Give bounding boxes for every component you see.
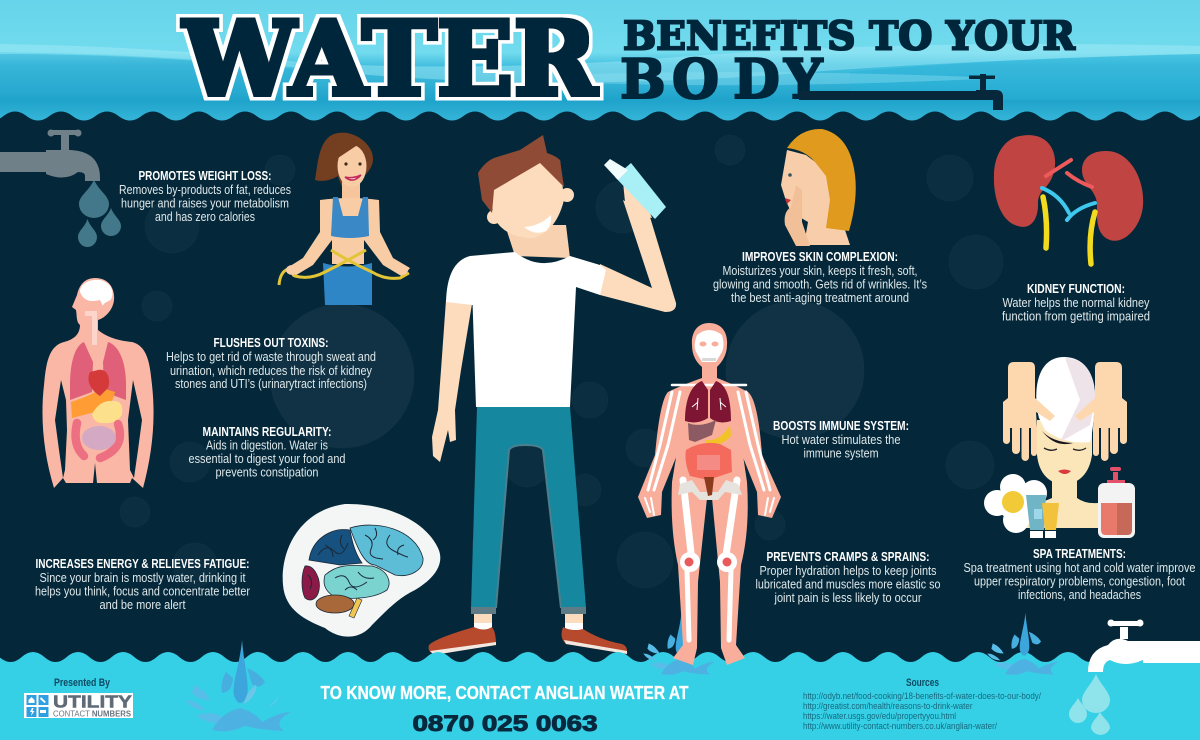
text block: promotes weight loss: and has zero calories (155, 210, 255, 224)
man: trousers (471, 407, 586, 608)
anatomy: liver and stomach (688, 420, 716, 442)
icon: woman with measuring tape (279, 133, 410, 305)
anatomy: arm and leg bones (645, 385, 774, 640)
text block: promotes weight loss: PROMOTES WEIGHT LOSS: (138, 169, 272, 183)
presented by label: Presented By (54, 677, 111, 689)
text block: flushes out toxins: FLUSHES OUT TOXINS: (214, 336, 328, 350)
man: ankles and socks (474, 614, 583, 630)
title: WATER: WATER (182, 0, 598, 120)
text block: spa treatments (964, 547, 1196, 602)
subtitle: benefits to your: BENEFITS TO YOUR (623, 14, 1076, 60)
anatomy: pelvis (678, 480, 742, 500)
icon: tap top left (0, 130, 121, 247)
man: left arm (432, 300, 472, 462)
logo: utility contact numbers (24, 692, 133, 718)
man: t-shirt (446, 252, 606, 407)
text block: maintains regularity (188, 425, 346, 480)
text block: flushes out toxins (166, 336, 376, 391)
text block: kidney function (1002, 282, 1150, 324)
icon: splash centre (186, 640, 291, 731)
sources heading: Sources (906, 677, 939, 689)
logo: utility contact numbers: UTILITY (53, 692, 132, 712)
icon: spa treatment (984, 357, 1135, 538)
icon: splash right (987, 613, 1059, 675)
anatomy: lungs (685, 381, 731, 422)
text block: spa treatments: SPA TREATMENTS: (1033, 547, 1126, 561)
anatomy: knees (680, 552, 737, 572)
anatomy: skin (638, 323, 781, 665)
anatomy: skull (695, 330, 724, 362)
text block: prevents cramps: Proper hydration helps to keep joints (760, 564, 936, 578)
text block: boosts immune system: Hot water stimulates the (782, 433, 901, 447)
spa: right hand (1075, 362, 1127, 461)
icon: kidneys (994, 135, 1143, 264)
text block: boosts immune system: immune system (804, 446, 878, 460)
text block: flushes out toxins: Helps to get rid of waste through sweat and (166, 350, 376, 364)
icon: splash at feet (643, 613, 715, 675)
logo: utility contact numbers: CONTACT NUMBERS (53, 710, 132, 718)
text block: increases energy: INCREASES ENERGY & RELIEVES FATIGUE: (36, 557, 250, 571)
text block: promotes weight loss: Removes by-products of fat, reduces (119, 183, 291, 197)
text block: improves skin complexion: the best anti-aging treatment around (731, 291, 909, 305)
sources list: https://water.usgs.gov/edu/propertyyou.html (803, 711, 956, 722)
wave: top edge of dark water (0, 112, 1200, 400)
text block: increases energy: and be more alert (100, 598, 186, 612)
man: neck (505, 225, 570, 258)
man: shoes (429, 627, 627, 655)
text block: prevents cramps: joint pain is less likely to occur (774, 591, 922, 605)
icon: woman with skin care (781, 129, 856, 246)
man: water bottle (604, 159, 666, 219)
footer band with wave (0, 652, 1200, 740)
text block: kidney function: Water helps the normal kidney (1002, 296, 1150, 310)
man: head (478, 135, 574, 238)
text block: prevents cramps (756, 550, 941, 605)
phone number: 0870 025 0063 (412, 711, 598, 736)
text block: maintains regularity: MAINTAINS REGULARITY: (202, 425, 332, 439)
text block: kidney function: KIDNEY FUNCTION: (1027, 282, 1125, 296)
spa: face (1037, 420, 1092, 485)
figure: skeleton and organs (638, 323, 781, 665)
text block: spa treatments: infections, and headaches (1018, 588, 1141, 602)
spa: left hand (1003, 362, 1055, 461)
man: hand (622, 172, 652, 218)
text block: improves skin complexion (713, 250, 927, 305)
decorative bubbles (120, 135, 1003, 588)
icon: title tap (799, 74, 1003, 110)
sources list: http://greatist.com/health/reasons-to-drink-water (803, 701, 972, 712)
text block: increases energy (35, 557, 250, 612)
text block: prevents cramps: lubricated and muscles more elastic so (756, 578, 941, 592)
sources list: http://www.utility-contact-numbers.co.uk/anglian-water/ (803, 721, 997, 732)
figure: man drinking water (429, 135, 676, 655)
text block: flushes out toxins: stones and UTI’s (urinarytract infections) (175, 377, 367, 391)
text block: promotes weight loss: hunger and raises your metabolism (121, 196, 289, 210)
text block: maintains regularity: prevents constipation (216, 466, 319, 480)
text block: maintains regularity: Aids in digestion. Water is (206, 438, 328, 452)
text block: boosts immune system (773, 419, 909, 460)
text block: kidney function: function from getting impaired (1002, 310, 1150, 324)
text block: increases energy: Since your brain is mostly water, drinking it (40, 571, 246, 585)
text block: flushes out toxins: urination, which reduces the risk of kidney (170, 364, 373, 378)
icon: tap bottom right (1069, 620, 1200, 735)
spa: daisy (984, 474, 1049, 533)
icon: brain (283, 504, 440, 637)
spa: towel (1036, 357, 1095, 442)
sources list: http://odyb.net/food-cooking/18-benefits-of-water-does-to-our-body/ (803, 691, 1041, 702)
spa: tubes (1026, 495, 1059, 538)
text block: boosts immune system: BOOSTS IMMUNE SYSTEM: (773, 419, 909, 433)
man: raised arm (600, 200, 676, 312)
text block: increases energy: helps you think, focus and concentrate better (35, 584, 250, 598)
icon: body with organs (42, 278, 154, 488)
header water band (0, 0, 1200, 125)
call to action: TO KNOW MORE, CONTACT ANGLIAN WATER AT (320, 682, 689, 703)
spa: fringe, eyes, lips (1042, 431, 1086, 474)
subtitle: body: BODY (620, 47, 824, 111)
text block: promotes weight loss (119, 169, 291, 224)
text block: improves skin complexion: Moisturizes your skin, keeps it fresh, soft, (722, 264, 918, 278)
anatomy: intestines (686, 443, 732, 480)
spa: pump bottle (1098, 467, 1135, 538)
text block: improves skin complexion: glowing and smooth. Gets rid of wrinkles. It’s (713, 278, 927, 292)
spa: shoulders and neck (1023, 470, 1098, 528)
text block: maintains regularity: essential to digest your food and (188, 452, 346, 466)
text block: improves skin complexion: IMPROVES SKIN COMPLEXION: (742, 250, 898, 264)
text block: prevents cramps: PREVENTS CRAMPS & SPRAINS: (766, 550, 930, 564)
sources list (803, 691, 1041, 732)
